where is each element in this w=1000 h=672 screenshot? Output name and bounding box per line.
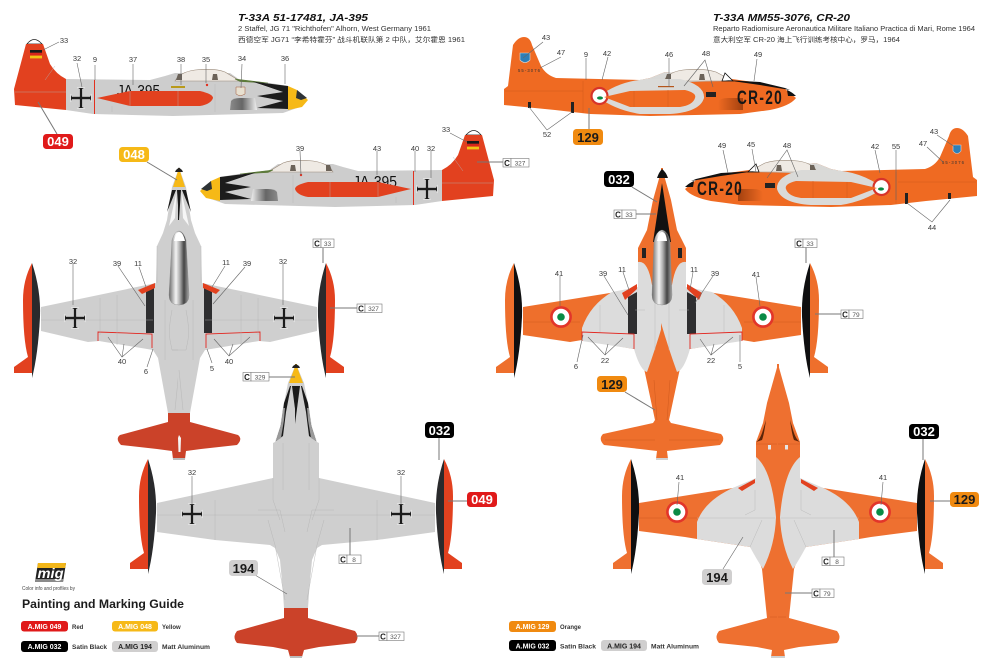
callouts: numbered markings, JA-395 top view: 32	[279, 257, 287, 266]
colour badge: 129 side: 129	[577, 130, 599, 145]
colour badge: 049 upper	[38, 102, 73, 149]
callouts: numbered markings, JA-395 top view: 32	[69, 257, 77, 266]
legend: left colour key: A.MIG 032	[28, 644, 62, 651]
paint code: C327 wing tank	[330, 304, 382, 313]
colour badge: 129 side	[573, 108, 603, 145]
legend: right colour key: Orange	[560, 625, 582, 631]
callouts: numbered markings, CR-20 side views: 48	[783, 141, 791, 150]
paint code: C327 side: 327	[515, 160, 526, 167]
colour badge: 129 lower right: 129	[954, 492, 975, 507]
callouts: numbered markings, CR-20 side views: 45	[747, 140, 755, 149]
callouts: numbered markings, CR-20 top view: 22	[707, 356, 715, 365]
callouts: numbered markings, JA-395 side views	[43, 36, 467, 178]
callouts: numbered markings, CR-20 side views: 42	[871, 142, 879, 151]
paint code: C79 wing tank: C	[842, 310, 848, 319]
callouts: numbered markings, JA-395 side views: 32	[73, 54, 81, 63]
heading: T-33A CR-20: T-33A MM55-3076, CR-20	[713, 12, 850, 24]
callouts: numbered markings, CR-20 side views: 9	[584, 50, 588, 59]
legend: right colour key: A.MIG 032	[516, 644, 550, 650]
aircraft: CR-20 right side view: 55-3076	[942, 160, 965, 165]
heading: T-33A JA-395: 2 Staffel, JG 71 "Richthofen" Alhorn, West Germany 1961	[238, 26, 431, 33]
callouts: numbered markings, CR-20 side views: 55	[892, 142, 900, 151]
legend: left colour key	[21, 621, 210, 652]
callouts: numbered markings, CR-20 side views: 42	[603, 49, 611, 58]
aircraft: CR-20 left side view: 55-3076	[518, 68, 541, 73]
callouts: numbered markings, JA-395 top view: 5	[210, 364, 214, 373]
callouts: numbered markings, CR-20 side views: 52	[543, 130, 551, 139]
callouts: numbered markings, underside views: 32	[188, 468, 196, 477]
colour badge: 032 lower right	[909, 424, 939, 460]
legend: right colour key: A.MIG 129	[516, 624, 550, 631]
paint code: C33 left wing tank	[313, 239, 334, 263]
paint code: C329: C	[244, 373, 250, 382]
paint code: C33 right wing tank: C	[796, 239, 802, 248]
paint code: C327 stabiliser: 327	[390, 634, 401, 641]
paint code: C79 fuselage: C	[813, 589, 819, 598]
paint code: C33 right wing tank: 33	[806, 241, 814, 248]
aircraft: CR-20 right side view: CR-20	[697, 178, 743, 200]
paint code: C8 left: 8	[352, 557, 356, 564]
aircraft: CR-20 top view	[496, 168, 828, 460]
callouts: numbered markings, CR-20 top view	[555, 265, 760, 371]
colour badge: 194 left: 194	[233, 561, 255, 576]
aircraft: JA-395 left side view: JA-395	[117, 83, 160, 100]
callouts: numbered markings, CR-20 side views: 44	[928, 223, 936, 232]
callouts: numbered markings, CR-20 side views: 43	[930, 127, 938, 136]
paint code: C8 right	[822, 530, 844, 566]
callouts: numbered markings, JA-395 side views: 33	[60, 36, 68, 45]
legend: left colour key: Satin Black	[72, 645, 108, 651]
paint code: C33 right wing tank	[795, 239, 817, 263]
callouts: numbered markings, CR-20 side views: 46	[665, 50, 673, 59]
aircraft: JA-395 left side view	[14, 40, 308, 116]
aircraft: CR-20 underside view	[613, 364, 943, 658]
colour badge: 129 fuselage	[597, 376, 655, 410]
aircraft: JA-395 right side view: JA-395	[353, 174, 397, 191]
callouts: numbered markings, CR-20 top view: 22	[601, 356, 609, 365]
colour badge: 032 lower left	[425, 422, 454, 460]
legend heading: Painting and Marking Guide	[22, 597, 184, 611]
callouts: numbered markings, JA-395 top view	[69, 257, 287, 376]
callouts: numbered markings, CR-20 top view: 11	[618, 265, 626, 274]
callouts: numbered markings, CR-20 top view: 39	[599, 269, 607, 278]
colour badge: 032 nose	[604, 171, 657, 202]
colour badge: 194 right	[702, 537, 743, 585]
callouts: numbered markings, JA-395 side views: 33	[442, 125, 450, 134]
legend: right colour key: Satin Black	[560, 644, 597, 650]
aircraft: JA-395 underside view	[130, 364, 462, 658]
colour badge: 048	[119, 147, 177, 180]
legend: left colour key: Matt Aluminum	[162, 645, 210, 651]
callouts: numbered markings, underside views	[188, 468, 887, 505]
aircraft: JA-395 top view	[14, 168, 344, 460]
callouts: numbered markings, JA-395 top view: 6	[144, 367, 148, 376]
callouts: numbered markings, CR-20 top view: 41	[752, 270, 760, 279]
callouts: numbered markings, CR-20 top view: 5	[738, 362, 742, 371]
paint code: C33 left wing tank: C	[314, 239, 320, 248]
legend: left colour key: A.MIG 049	[28, 624, 62, 631]
callouts: numbered markings, JA-395 top view: 40	[118, 357, 126, 366]
callouts: numbered markings, JA-395 side views: 38	[177, 55, 185, 64]
callouts: numbered markings, underside views: 32	[397, 468, 405, 477]
heading: T-33A CR-20: 意大利空军 CR-20 海上飞行训练考核中心，罗马，1964	[713, 35, 900, 44]
paint code: C33 nose: C	[615, 210, 621, 219]
colour badge: 129 fuselage: 129	[601, 377, 623, 392]
heading: T-33A CR-20	[713, 12, 975, 44]
callouts: numbered markings, CR-20 side views: 47	[557, 48, 565, 57]
colour badge: 032 lower right: 032	[913, 424, 935, 439]
callouts: numbered markings, underside views: 41	[879, 473, 887, 482]
paint code: C79 fuselage: 79	[823, 591, 831, 598]
callouts: numbered markings, JA-395 side views: 40	[411, 144, 419, 153]
colour badge: 032 nose: 032	[608, 172, 630, 187]
paint code: C8 right: 8	[835, 559, 839, 566]
colour badge: 049 lower: 049	[471, 492, 493, 507]
callouts: numbered markings, JA-395 side views: 34	[238, 54, 246, 63]
callouts: numbered markings, JA-395 side views: 36	[281, 54, 289, 63]
legend: left colour key: Red	[72, 625, 84, 631]
credit line: Color info and profiles by	[22, 586, 75, 592]
colour badge: 049 lower	[448, 492, 497, 507]
callouts: numbered markings, JA-395 top view: 40	[225, 357, 233, 366]
paint code: C327 wing tank: 327	[368, 306, 379, 313]
legend: right colour key	[509, 621, 699, 651]
aircraft: CR-20 left side view: CR-20	[737, 87, 783, 109]
callouts: numbered markings, CR-20 top view: 41	[555, 269, 563, 278]
callouts: numbered markings, JA-395 side views: 32	[427, 144, 435, 153]
paint code: C8 left	[339, 528, 361, 564]
callouts: numbered markings, JA-395 side views: 35	[202, 55, 210, 64]
aircraft: CR-20 left side view	[504, 37, 796, 116]
callouts: numbered markings, JA-395 top view: 39	[243, 259, 251, 268]
paint code: C327 stabiliser	[356, 632, 404, 641]
aircraft: JA-395 right side view	[200, 130, 494, 207]
paint code: C8 left: C	[340, 555, 346, 564]
callouts: numbered markings, JA-395 side views: 9	[93, 55, 97, 64]
logo: MIG	[35, 563, 66, 582]
callouts: numbered markings, JA-395 top view: 39	[113, 259, 121, 268]
callouts: numbered markings, CR-20 side views: 48	[702, 49, 710, 58]
legend: left colour key: A.MIG 194	[118, 644, 152, 651]
paint code: C329	[243, 372, 295, 382]
aircraft: CR-20 right side view	[685, 128, 977, 207]
paint code: C33 nose: 33	[625, 212, 633, 219]
legend: right colour key: Matt Aluminum	[651, 644, 699, 650]
paint code: C33 left wing tank: 33	[324, 241, 331, 248]
colour badge: 194 right: 194	[706, 570, 729, 585]
paint code: C8 right: C	[823, 557, 829, 566]
paint code: C327 stabiliser: C	[380, 632, 386, 641]
callouts: numbered markings, JA-395 top view: 11	[222, 258, 230, 267]
legend: left colour key: A.MIG 048	[118, 624, 152, 631]
legend: left colour key: Yellow	[162, 625, 181, 631]
heading: T-33A JA-395: 西德空军 JG71 “李希特霍芬” 战斗机联队第 2 中队，艾尔霍恩 1961	[238, 35, 465, 44]
colour badge: 032 lower left: 032	[429, 423, 450, 438]
colour badge: 049 upper: 049	[47, 134, 69, 149]
callouts: numbered markings, JA-395 side views: 43	[373, 144, 381, 153]
colour badge: 048: 048	[123, 147, 145, 162]
paint code: C79 wing tank	[815, 310, 863, 319]
callouts: numbered markings, CR-20 top view: 6	[574, 362, 578, 371]
paint code: C327 side	[477, 158, 529, 168]
callouts: numbered markings, CR-20 side views: 47	[919, 139, 927, 148]
callouts: numbered markings, CR-20 side views: 43	[542, 33, 550, 42]
callouts: numbered markings, JA-395 side views: 39	[296, 144, 304, 153]
callouts: numbered markings, CR-20 side views: 49	[754, 50, 762, 59]
callouts: numbered markings, CR-20 side views: 49	[718, 141, 726, 150]
callouts: numbered markings, underside views: 41	[676, 473, 684, 482]
paint code: C79 fuselage	[785, 589, 834, 598]
heading: T-33A JA-395	[238, 12, 465, 44]
callouts: numbered markings, JA-395 side views: 37	[129, 55, 137, 64]
callouts: numbered markings, CR-20 top view: 11	[690, 265, 698, 274]
callouts: numbered markings, CR-20 side views	[523, 33, 955, 232]
colour badge: 129 lower right	[930, 492, 979, 507]
logo: MIG: mig	[38, 565, 64, 581]
callouts: numbered markings, JA-395 top view: 11	[134, 259, 142, 268]
paint code: C327 wing tank: C	[358, 304, 364, 313]
callouts: numbered markings, CR-20 top view: 39	[711, 269, 719, 278]
heading: T-33A JA-395: T-33A 51-17481, JA-395	[238, 12, 368, 24]
colour badge: 194 left	[229, 560, 287, 594]
paint code: C79 wing tank: 79	[852, 312, 860, 319]
paint code: C329: 329	[255, 374, 266, 381]
heading: T-33A CR-20: Reparto Radiomisure Aeronautica Militare Italiano Practica di Mari, Rome 1964	[713, 26, 975, 33]
paint code: C33 nose	[614, 210, 656, 219]
paint code: C327 side: C	[504, 159, 510, 168]
legend: right colour key: A.MIG 194	[607, 644, 641, 650]
